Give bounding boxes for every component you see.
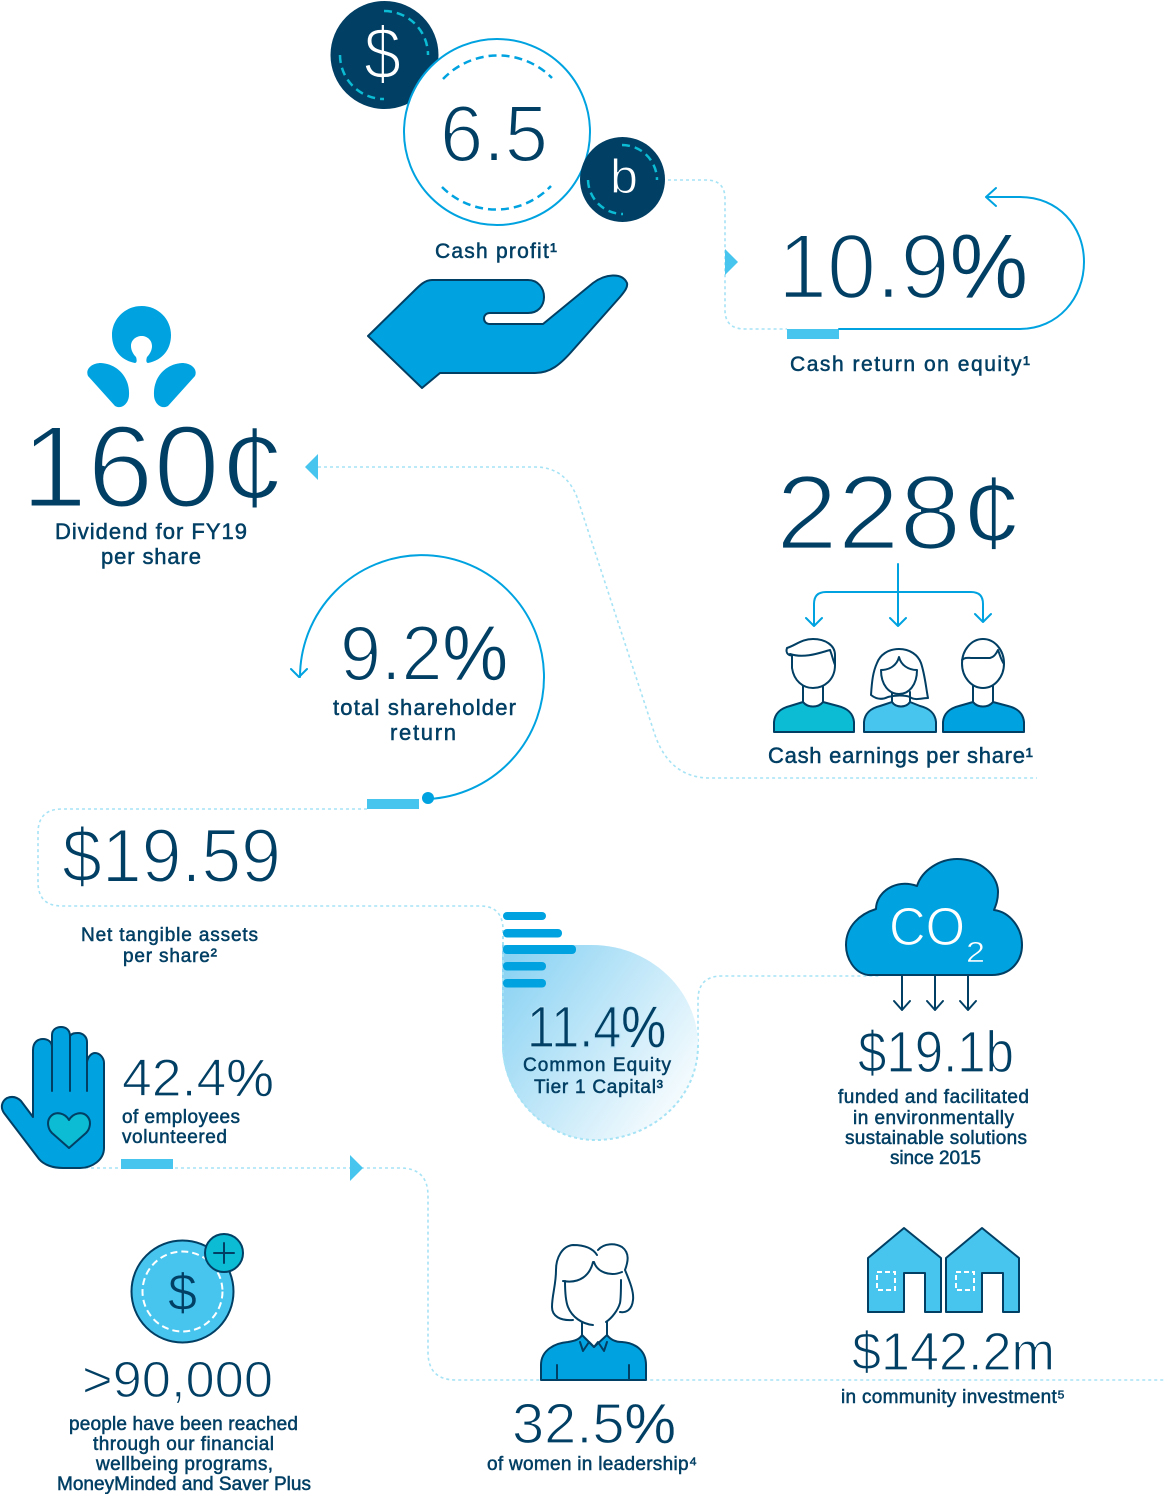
- label: Dividend for FY19: [55, 519, 247, 544]
- description: sustainable solutions: [845, 1128, 1027, 1149]
- circular arrow: [291, 555, 544, 799]
- description: people have been reached: [69, 1414, 298, 1435]
- label: total shareholder: [333, 695, 516, 720]
- arrow marker: [305, 454, 318, 480]
- value: $19.1b: $19.1b: [858, 1020, 1014, 1085]
- icon: CO2 cloud: 2: [966, 937, 985, 969]
- bar accent: [787, 329, 839, 339]
- description: through our financial: [93, 1434, 274, 1455]
- value circle: 6.5: [404, 39, 590, 225]
- label: in community investment⁵: [841, 1387, 1065, 1408]
- icon: person two: [864, 649, 936, 732]
- arrow marker: [350, 1155, 363, 1181]
- description: [838, 1087, 1029, 1169]
- panel: common equity tier 1 capital: [502, 912, 698, 1140]
- label: of employees: [122, 1107, 240, 1128]
- icon: woman: [541, 1244, 646, 1380]
- icon: CO2 cloud: [846, 859, 1022, 975]
- gradient bubble: [502, 945, 698, 1140]
- icon: b coin: b: [610, 151, 638, 204]
- description: since 2015: [890, 1148, 981, 1169]
- description: funded and facilitated: [838, 1087, 1029, 1108]
- panel: dividend: [21, 306, 318, 569]
- icon: dollar coin: [330, 1, 438, 109]
- stacked bars: [503, 912, 576, 988]
- icon: hand with heart: [2, 1027, 104, 1168]
- panel: cash profit: [330, 1, 665, 388]
- description: wellbeing programs,: [95, 1454, 273, 1475]
- label: Net tangible assets: [81, 925, 258, 946]
- panel: total shareholder return: [291, 555, 544, 809]
- icon: b coin: [580, 137, 665, 222]
- panel: cash earnings per share: [768, 454, 1033, 768]
- panel: employees volunteered: [2, 1027, 363, 1181]
- label line two: per share²: [123, 946, 217, 967]
- value: 9.2%: 9.2%: [340, 609, 508, 697]
- value: 32.5%: 32.5%: [512, 1392, 676, 1456]
- label line two: return: [390, 720, 456, 745]
- panel: financial wellbeing reach: [57, 1234, 311, 1494]
- icon: open hand: [368, 275, 627, 388]
- label line two: per share: [101, 544, 201, 569]
- description: [57, 1414, 311, 1494]
- panel: community investment: [841, 1228, 1065, 1408]
- looping arrow: [839, 188, 1084, 329]
- description: in environmentally: [853, 1108, 1014, 1129]
- value: $142.2m: $142.2m: [852, 1322, 1055, 1382]
- icon: houses: [868, 1228, 1019, 1312]
- label: Cash return on equity¹: [790, 353, 1030, 376]
- panel: cash return on equity: [725, 188, 1084, 376]
- label line two: volunteered: [122, 1127, 227, 1148]
- icon: down arrows: [894, 976, 976, 1010]
- label: cash profit: Cash profit¹: [435, 240, 557, 263]
- label line two: Tier 1 Capital³: [534, 1077, 663, 1098]
- icon: bank logo: [87, 306, 196, 407]
- value: 11.4%: 11.4%: [527, 995, 666, 1060]
- icon: coin with plus: [132, 1234, 243, 1342]
- value: $19.59: $19.59: [62, 814, 281, 899]
- branching arrows: [806, 564, 991, 626]
- label: Common Equity: [523, 1055, 672, 1076]
- value: 228¢: 228¢: [776, 454, 1023, 572]
- label: Cash earnings per share¹: [768, 743, 1033, 768]
- icon: person one: [774, 639, 854, 732]
- icon: person three: [943, 639, 1024, 732]
- value: 10.9%: 10.9%: [778, 216, 1028, 318]
- arrow marker: [725, 249, 738, 275]
- panel: net tangible assets: [62, 814, 281, 967]
- icon: dollar coin: $: [364, 12, 401, 95]
- value: >90,000: >90,000: [82, 1351, 273, 1408]
- connector: dotted paths: [38, 180, 1164, 1380]
- icon: CO2 cloud: CO: [889, 897, 965, 957]
- bar accent: [121, 1159, 173, 1169]
- label: of women in leadership⁴: [487, 1454, 697, 1475]
- dot: [422, 792, 434, 804]
- value: 160¢: 160¢: [21, 401, 286, 532]
- bar accent: [367, 799, 419, 809]
- value: 42.4%: 42.4%: [122, 1049, 274, 1108]
- panel: sustainable solutions: [838, 859, 1029, 1169]
- icon: coin with plus: $: [168, 1264, 197, 1322]
- value circle: 6.5: 6.5: [440, 89, 548, 178]
- panel: women in leadership: [487, 1244, 697, 1475]
